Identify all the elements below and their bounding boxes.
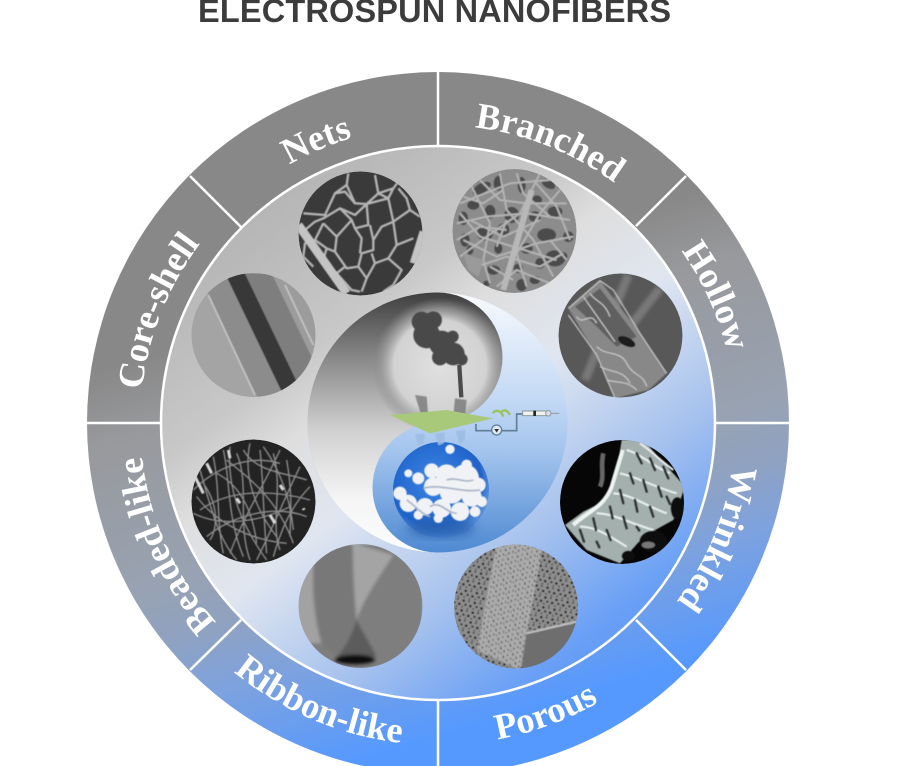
blue lower half (308, 292, 568, 552)
label: Branched: Branched (475, 104, 627, 183)
micrograph: nets (298, 172, 423, 296)
filter membrane with flows (390, 395, 493, 446)
label: Ribbon-like: Ribbon-like (234, 653, 402, 742)
micrograph: ribbon-like (297, 543, 423, 670)
center yin-yang emblem (308, 292, 568, 552)
label: Hollow: Hollow (682, 238, 744, 347)
label: Porous: Porous (492, 688, 596, 740)
micrograph: porous (453, 543, 579, 670)
micrograph: wrinkled (560, 440, 685, 564)
factory smoke and chimney (412, 311, 468, 397)
inner disk (161, 146, 715, 700)
electrospinning circuit and syringe (476, 410, 559, 435)
earth with clouds (393, 442, 489, 538)
grey upper half (308, 292, 502, 552)
outer ring (87, 72, 789, 766)
micrograph: branched (452, 169, 576, 293)
micrograph: beaded-like (192, 440, 316, 564)
label: Wrinkled: Wrinkled (677, 470, 757, 614)
label: Beaded-like: Beaded-like (122, 458, 216, 638)
smoke backdrop (380, 300, 502, 426)
label: Core-shell: Core-shell (120, 230, 200, 386)
micrograph: hollow (558, 274, 682, 398)
micrograph: core-shell (192, 273, 316, 397)
diagram: nanofiber morphology wheel (87, 72, 789, 766)
label: Nets: Nets (278, 122, 350, 164)
